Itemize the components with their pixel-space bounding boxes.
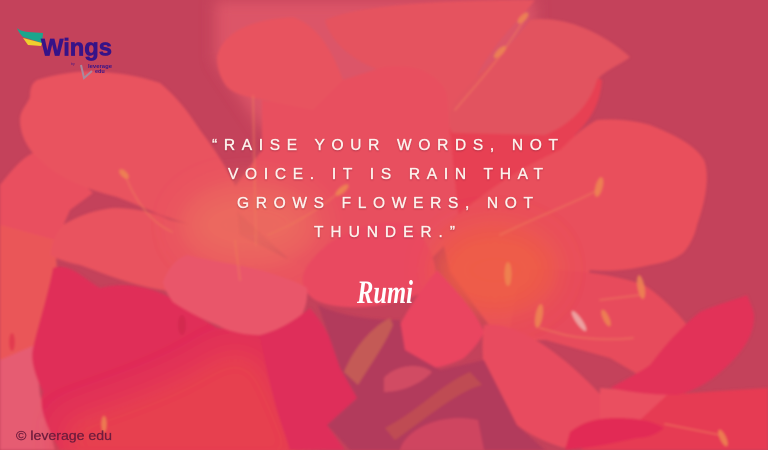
icon: teal wing (17, 28, 43, 43)
icon: yellow wing (23, 38, 42, 46)
left edge orange (0, 225, 60, 370)
petal: left upper large (20, 71, 240, 240)
stamen tips (102, 11, 730, 447)
petal: bottom right (580, 388, 768, 450)
attribution: Rumi: Rumi (356, 275, 414, 311)
footer: copyright: © leverage edu (16, 428, 112, 443)
bud petal pale lower (400, 418, 484, 450)
petal: bottom-left right red (260, 308, 357, 450)
icon: leverage tick (81, 65, 92, 78)
petal: pale joint right (600, 388, 680, 425)
petal: left lower (50, 208, 310, 300)
petal: red under right top petal (420, 75, 602, 240)
logo wordmark: Wings (41, 34, 112, 62)
petal: left small of right flower (400, 270, 484, 368)
quote line 4: THUNDER.” (314, 224, 455, 241)
petal: left edge upper (0, 153, 93, 265)
petal: bottom-left crimson (32, 267, 320, 450)
dark anther left (9, 333, 15, 351)
petal: right upper big (440, 119, 707, 340)
bottom-left flower throat (60, 348, 310, 450)
petal: right lower (510, 270, 687, 378)
logo byline: by (71, 62, 75, 66)
petal: top left lobe (217, 17, 343, 110)
orange heart: right flower (433, 225, 557, 315)
petal: central rear (225, 66, 460, 270)
bud petal pale upper (384, 366, 432, 392)
petal: top centre (325, 0, 535, 130)
petal: centre lobe (303, 222, 436, 307)
quote line 1: “RAISE YOUR WORDS, NOT (212, 137, 559, 154)
petal: top right (449, 19, 630, 135)
left flower centre (180, 183, 320, 267)
bud lower crimson (565, 418, 664, 450)
flower stem (344, 318, 393, 385)
top band behind flowers (215, 0, 535, 140)
quote text (212, 137, 559, 241)
lip of left flower (163, 255, 307, 335)
logo sub wordmark: leverage (88, 64, 112, 70)
quote line 2: VOICE. IT IS RAIN THAT (228, 166, 544, 183)
quote line 3: GROWS FLOWERS, NOT (237, 195, 534, 212)
left edge pale (0, 345, 55, 450)
logo: Wings by leverage edu (17, 28, 112, 78)
bud right (610, 295, 754, 395)
dark anther centre (178, 315, 186, 335)
dark stem region (318, 305, 545, 450)
logo sub wordmark second line: edu (95, 69, 105, 75)
flower stem lower (385, 372, 482, 440)
stamens (125, 18, 720, 435)
pale anther (570, 309, 588, 333)
petal: lower central (482, 325, 611, 448)
